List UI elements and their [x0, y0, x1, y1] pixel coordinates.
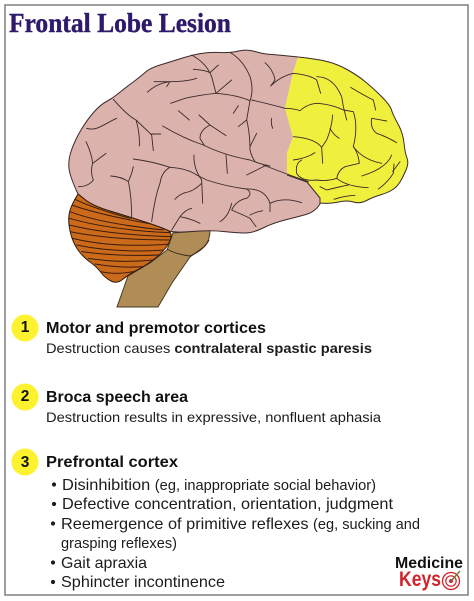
sulci left [78, 52, 270, 230]
number badge 2 [12, 384, 38, 410]
description 1: Destruction causes contralateral spastic paresis [46, 340, 372, 356]
frontal lobe highlighted in yellow [285, 57, 408, 203]
bullet list: Reemergence of primitive reflexes (eg, sucking and [61, 516, 420, 533]
heading 1: Motor and premotor cortices [46, 320, 266, 337]
parietal, temporal and occipital cortex [69, 50, 320, 233]
item 3: prefrontal cortex [12, 448, 420, 591]
description 2: Destruction results in expressive, nonfluent aphasia [46, 409, 381, 425]
bullet list: Sphincter incontinence [61, 574, 225, 591]
number badge 1: 1 [21, 319, 30, 336]
bullet list: grasping reflexes) [61, 536, 177, 552]
Medicine Keys logo [395, 555, 463, 591]
number badge 1 [12, 314, 38, 342]
item 1: motor and premotor cortices [12, 314, 372, 356]
sulci right [252, 63, 400, 212]
bullet list: Disinhibition (eg, inappropriate social behavior) [62, 477, 376, 494]
bullet list: Defective concentration, orientation, judgment [62, 496, 394, 513]
bullet list [51, 477, 420, 591]
number badge 3 [12, 448, 38, 476]
Medicine Keys logo: Keys [399, 568, 441, 591]
number badge 2: 2 [21, 388, 29, 405]
cerebrum outline [69, 50, 408, 233]
brainstem [117, 230, 210, 307]
heading 3: Prefrontal cortex [46, 454, 178, 471]
heading 2: Broca speech area [46, 389, 188, 406]
bullet list: Gait apraxia [61, 555, 147, 572]
cerebellum [69, 194, 173, 282]
brain illustration [69, 50, 408, 307]
item 2: Broca speech area [12, 384, 381, 425]
icon: target with arrow [442, 571, 460, 590]
title: Frontal Lobe Lesion [9, 8, 231, 38]
Medicine Keys logo: Medicine [395, 555, 463, 572]
number badge 3: 3 [21, 454, 30, 471]
